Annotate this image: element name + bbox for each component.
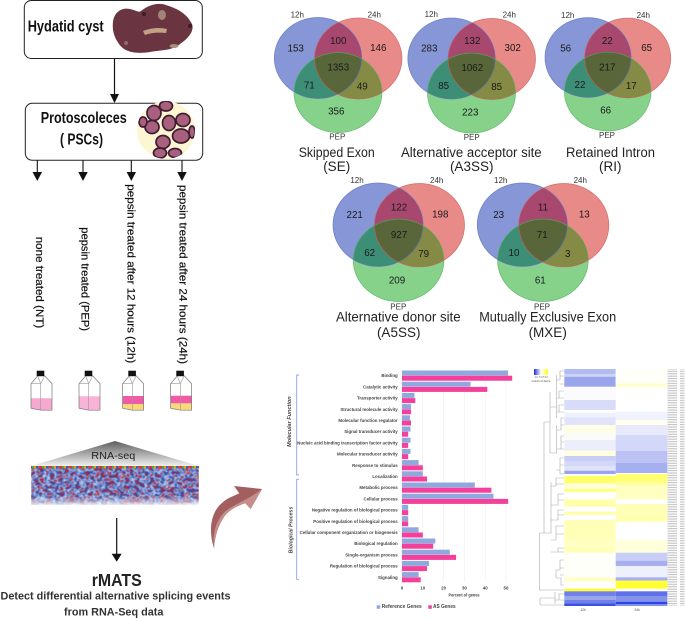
venn: mutually exclusive exon: 11 bbox=[538, 202, 548, 214]
x axis labels: 50 bbox=[504, 586, 509, 590]
venn: alternative acceptor site: 302 bbox=[505, 43, 521, 54]
text: rMATS description bbox=[0, 591, 230, 618]
venn: skipped exon: 12h bbox=[291, 10, 304, 20]
bars and category labels: Negative regulation of biological process bbox=[312, 508, 398, 513]
venn: alternative donor site: Alternative donor site bbox=[336, 310, 461, 324]
venn: mutually exclusive exon: 61 bbox=[535, 276, 546, 286]
bars and category labels: Localization bbox=[372, 474, 398, 479]
bars and category labels: Biological regulation bbox=[354, 541, 398, 546]
label: pepsin treated after 24 hours: pepsin treated after 24 hours (24h) bbox=[177, 185, 189, 364]
label: none treated: none treated (NT) bbox=[33, 237, 45, 328]
venn: alternative acceptor site: 85 bbox=[491, 82, 503, 93]
venn: skipped exon: 24h bbox=[368, 10, 381, 20]
bars and category labels bbox=[297, 370, 512, 582]
bars and category labels: Molecular transducer activity bbox=[337, 452, 398, 457]
venn: alternative acceptor site: 12h bbox=[425, 10, 438, 19]
venn: skipped exon: 146 bbox=[370, 43, 387, 54]
box: protoscoleces: Protoscoleces bbox=[41, 110, 127, 127]
icon: flask PEP bbox=[79, 371, 100, 410]
venn: alternative acceptor site: PEP bbox=[464, 133, 480, 142]
bars and category labels: Transporter activity bbox=[357, 396, 398, 401]
venn: alternative acceptor site: (A3SS) bbox=[450, 159, 493, 174]
column labels: 24h bbox=[634, 608, 640, 612]
venn: skipped exon: PEP bbox=[329, 132, 345, 142]
box: protoscoleces: ( PSCs) bbox=[60, 132, 103, 148]
legend: Reference Genes bbox=[382, 604, 422, 610]
venn: mutually exclusive exon: PEP bbox=[534, 302, 550, 312]
bars and category labels: Binding bbox=[381, 373, 398, 378]
x axis labels: 30 bbox=[462, 586, 467, 590]
venn: skipped exon: (SE) bbox=[323, 159, 350, 174]
column labels: 12h bbox=[580, 608, 586, 612]
venn: alternative acceptor site bbox=[401, 10, 542, 174]
bars and category labels: Structural molecule activity bbox=[340, 407, 398, 412]
venn: mutually exclusive exon: 10 bbox=[509, 248, 520, 259]
arrows: four treatments bbox=[32, 160, 187, 181]
column 24h bbox=[616, 369, 667, 606]
arrow: cyst to protoscoleces bbox=[110, 58, 119, 103]
venn: skipped exon: 153 bbox=[288, 44, 304, 54]
color key: -10 -5 0 5 10 bbox=[534, 376, 548, 379]
label: pepsin treated after 12 hours: pepsin treated after 12 hours (12h) bbox=[125, 184, 137, 363]
color key: Column Z-Score bbox=[532, 379, 551, 383]
venn: mutually exclusive exon: 13 bbox=[579, 210, 590, 220]
bar chart: gene ontology bbox=[287, 370, 512, 610]
bars and category labels: Signaling bbox=[378, 575, 398, 580]
heading: rMATS: rMATS bbox=[92, 570, 142, 590]
legend: AS Genes bbox=[433, 604, 456, 610]
x axis labels bbox=[401, 586, 509, 598]
venn: alternative donor site: (A5SS) bbox=[377, 325, 420, 340]
label: pepsin treated: pepsin treated (PEP) bbox=[79, 227, 91, 331]
bracket: biological process bbox=[289, 479, 299, 579]
text: rMATS description: Detect differential alternative splicing events bbox=[0, 591, 230, 603]
venn: skipped exon: 100 bbox=[330, 36, 347, 47]
text: rMATS description: from RNA-Seq data bbox=[64, 606, 164, 618]
venn: retained intron: 17 bbox=[626, 81, 637, 92]
venn: alternative donor site: 79 bbox=[418, 249, 429, 260]
box: hydatid cyst bbox=[24, 0, 202, 58]
bars and category labels: Signal transducer activity bbox=[344, 429, 398, 434]
venn: skipped exon: 356 bbox=[328, 106, 345, 118]
venn: retained intron: (RI) bbox=[599, 159, 622, 174]
venn: retained intron: 56 bbox=[560, 44, 572, 54]
x axis labels: 10 bbox=[420, 586, 426, 590]
venn: mutually exclusive exon: 71 bbox=[537, 230, 548, 241]
bars and category labels: Catalytic activity bbox=[363, 384, 398, 389]
venn: retained intron: 24h bbox=[637, 11, 650, 20]
venn: alternative acceptor site: 223 bbox=[462, 108, 479, 118]
bracket: molecular function: Molecular Function bbox=[287, 396, 293, 447]
venn: retained intron: 66 bbox=[600, 106, 612, 116]
venn: alternative acceptor site: Alternative acceptor site bbox=[401, 145, 542, 160]
icon: flask 12h bbox=[123, 371, 144, 410]
venn: retained intron bbox=[545, 11, 671, 174]
bars and category labels: Regulation of biological process bbox=[330, 564, 398, 569]
panel: workflow bbox=[0, 0, 230, 618]
venn: alternative donor site bbox=[333, 176, 465, 340]
bars and category labels: Positive regulation of biological process bbox=[313, 519, 398, 524]
column labels bbox=[580, 608, 640, 612]
venn: alternative donor site: 221 bbox=[347, 210, 363, 221]
arrow: curved arrow to results bbox=[211, 486, 262, 548]
row labels bbox=[668, 369, 684, 606]
x axis labels: 0 bbox=[401, 586, 404, 590]
venn: retained intron: 217 bbox=[599, 62, 615, 74]
icon: protoscoleces micrograph bbox=[137, 101, 195, 159]
venn: skipped exon: Skipped Exon bbox=[299, 145, 375, 160]
color key bbox=[532, 369, 551, 383]
venn: mutually exclusive exon bbox=[477, 176, 616, 340]
venn: alternative donor site: 12h bbox=[350, 176, 364, 185]
bars and category labels: Nucleic acid binding transcription factor activity bbox=[297, 440, 398, 445]
venn: alternative donor site: 24h bbox=[430, 176, 443, 185]
box: protoscoleces bbox=[25, 101, 203, 160]
icon: flask 24h bbox=[171, 371, 192, 410]
venn: skipped exon: 71 bbox=[304, 80, 315, 92]
venn: mutually exclusive exon: 3 bbox=[565, 249, 571, 260]
graphic: RNA-seq reads: RNA-seq bbox=[91, 451, 136, 462]
venn: alternative donor site: 198 bbox=[432, 210, 449, 220]
venn: mutually exclusive exon: 24h bbox=[574, 176, 587, 185]
bracket: molecular function bbox=[287, 375, 299, 475]
venn: alternative donor site: 209 bbox=[389, 276, 405, 286]
venn: retained intron: 22 bbox=[602, 36, 613, 47]
icon: liver photo bbox=[113, 4, 193, 53]
x axis labels: Percent of genes bbox=[448, 592, 480, 598]
venn: skipped exon: 1353 bbox=[327, 62, 350, 74]
bars and category labels: Metabolic process bbox=[359, 485, 398, 490]
venn: retained intron: 12h bbox=[561, 11, 574, 20]
bars and category labels: Cellular component organization or biogenesis bbox=[300, 530, 398, 535]
venn: alternative acceptor site: 132 bbox=[464, 36, 480, 47]
venn: alternative acceptor site: 24h bbox=[503, 10, 516, 20]
venn: alternative acceptor site: 283 bbox=[421, 44, 438, 54]
arrow: RNA-seq to rMATS bbox=[112, 518, 122, 562]
venn: retained intron: 65 bbox=[641, 43, 653, 54]
graphic: RNA-seq reads bbox=[31, 441, 199, 506]
venn: alternative donor site: 122 bbox=[391, 202, 407, 214]
venn: retained intron: Retained Intron bbox=[566, 145, 655, 160]
venn: alternative acceptor site: 1062 bbox=[461, 63, 483, 74]
bracket: biological process: Biological Process bbox=[289, 507, 295, 553]
panel: venn diagrams bbox=[274, 10, 671, 340]
heatmap bbox=[532, 369, 684, 612]
x axis labels: 40 bbox=[483, 586, 488, 590]
venn: alternative donor site: 62 bbox=[364, 248, 375, 259]
venn: skipped exon bbox=[274, 10, 402, 174]
venn: alternative donor site: PEP bbox=[390, 302, 406, 312]
venn: mutually exclusive exon: Mutually Exclusive Exon bbox=[479, 310, 616, 324]
venn: alternative donor site: 927 bbox=[391, 230, 407, 241]
venn: skipped exon: 49 bbox=[357, 82, 368, 92]
bars and category labels: Molecular function regulator bbox=[338, 418, 398, 423]
dendrogram bbox=[539, 371, 564, 605]
venn: retained intron: 22 bbox=[575, 80, 585, 91]
bars and category labels: Response to stimulus bbox=[352, 463, 398, 468]
venn: mutually exclusive exon: (MXE) bbox=[529, 325, 567, 340]
x axis labels: 20 bbox=[441, 586, 447, 590]
box: hydatid cyst: Hydatid cyst bbox=[28, 18, 104, 36]
venn: retained intron: PEP bbox=[599, 131, 615, 140]
venn: mutually exclusive exon: 12h bbox=[494, 176, 507, 185]
venn: mutually exclusive exon: 23 bbox=[493, 210, 505, 221]
column 12h bbox=[564, 369, 616, 606]
bars and category labels: Cellular process bbox=[364, 496, 398, 501]
icon: flask NT bbox=[31, 371, 52, 410]
venn: alternative acceptor site: 85 bbox=[438, 81, 450, 92]
bars and category labels: Single-organism process bbox=[345, 552, 398, 557]
legend bbox=[377, 604, 456, 610]
